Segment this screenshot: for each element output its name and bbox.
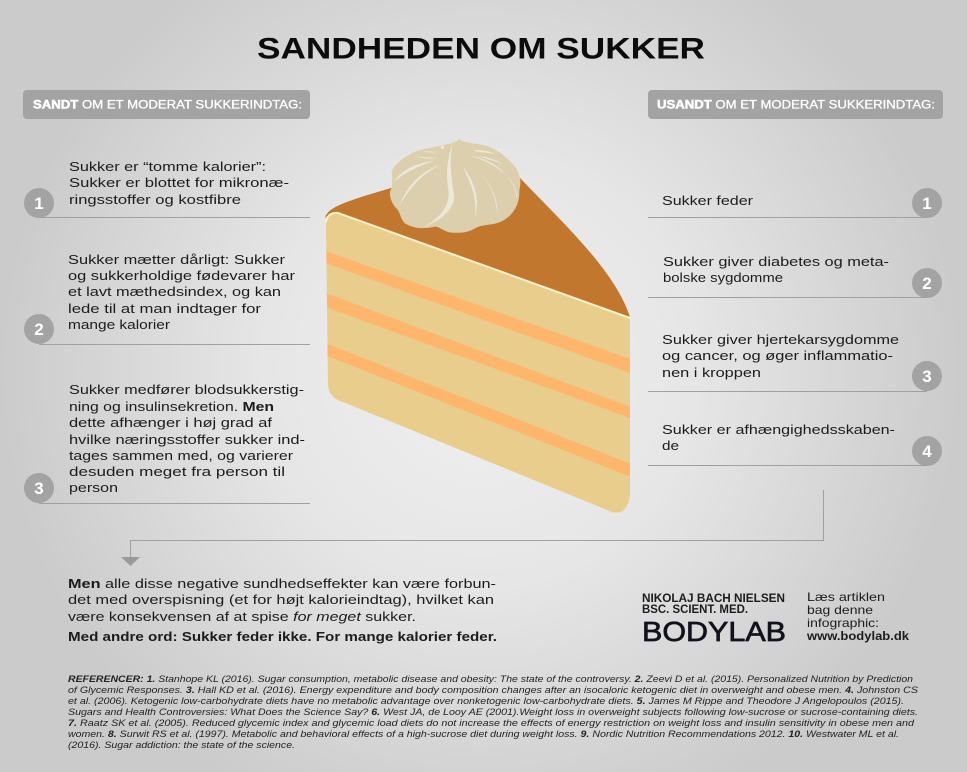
item 3: hvilke næringsstoffer sukker ind- xyxy=(69,432,305,447)
item 1: Sukker feder xyxy=(662,193,754,208)
item 1: 1 xyxy=(922,194,932,213)
item 3: tages sammen med, og varierer xyxy=(69,448,294,463)
conclusion text: Men alle disse negative sundhedseffekter kan være forbun- xyxy=(68,576,496,591)
references: of Glycemic Responses. 3. Hall KD et al. (2016). Energy expenditure and body composition changes after an isocaloric ketogenic diet in overweight and obese men. 4. Johnston CS xyxy=(68,685,919,695)
item 2 xyxy=(648,254,942,298)
panel: true statements xyxy=(23,90,310,504)
item 2: lede til at man indtager for xyxy=(68,301,262,316)
item 4: de xyxy=(662,438,679,453)
item 2: 2 xyxy=(34,320,44,339)
conclusion text xyxy=(68,576,497,644)
references: Sugars and Health Controversies: What Does the Science Say? 6. West JA, de Looy AE (2001).Weight loss in overweight subjects following low-sucrose or sucrose-containing diets. xyxy=(68,707,918,717)
item 1 xyxy=(648,188,942,218)
conclusion text: Med andre ord: Sukker feder ikke. For mange kalorier feder. xyxy=(68,629,497,644)
item 2 xyxy=(24,252,310,344)
link to article: Læs artiklen xyxy=(807,590,885,604)
author and logo: BODYLAB xyxy=(642,616,786,647)
item 2: Sukker giver diabetes og meta- xyxy=(663,254,889,269)
item 2: 2 xyxy=(922,274,932,293)
conclusion text: være konsekvensen af at spise for meget sukker. xyxy=(68,609,416,624)
panel: false statements xyxy=(648,90,943,466)
item 3 xyxy=(648,332,942,392)
link to article xyxy=(806,590,909,643)
item 4: Sukker er afhængighedsskaben- xyxy=(662,422,895,437)
item 3: dette afhænger i høj grad af xyxy=(69,415,272,430)
item 3: og cancer, og øger inflammatio- xyxy=(662,348,893,363)
item 1: Sukker er blottet for mikronæ- xyxy=(69,175,289,190)
item 4: 4 xyxy=(922,442,932,461)
references xyxy=(68,674,919,750)
item 3: nen i kroppen xyxy=(662,365,761,380)
references: et al. (2006). Ketogenic low-carbohydrate diets have no metabolic advantage over nonketogenic low-carbohydrate diets. 5. James M Rippe and Theodore J Angelopoulos (2015). xyxy=(68,696,904,706)
link to article: bag denne xyxy=(807,603,873,617)
author and logo: BSC. SCIENT. MED. xyxy=(642,604,748,616)
link to article: infographic: xyxy=(807,616,879,630)
item 2: et lavt mæthedsindex, og kan xyxy=(68,284,281,299)
link to article: www.bodylab.dk xyxy=(806,629,909,643)
item 1: ringsstoffer og kostfibre xyxy=(69,192,241,207)
illustration: cake slice xyxy=(320,139,636,513)
item 3: 3 xyxy=(922,367,932,386)
heading: usandt: USANDT OM ET MODERAT SUKKERINDTAG: xyxy=(657,100,935,112)
meringue topping xyxy=(390,139,520,233)
item 2: bolske sygdomme xyxy=(663,270,783,285)
item 3: ning og insulinsekretion. Men xyxy=(69,399,274,414)
references: 7. Raatz SK et al. (2005). Reduced glycemic index and glycemic load diets do not increase the effects of energy restriction on weight loss and insulin sensitivity in obese men and xyxy=(68,718,915,728)
item 3: 3 xyxy=(34,479,44,498)
author and logo xyxy=(642,593,786,647)
item 3: person xyxy=(69,480,118,495)
references: REFERENCER: 1. Stanhope KL (2016). Sugar consumption, metabolic disease and obesity: The state of the controversy. 2. Zeevi D et al. (2015). Personalized Nutrition by Prediction xyxy=(68,674,913,684)
references: (2016). Sugar addiction: the state of the science. xyxy=(68,740,295,750)
arrow: connector to conclusion xyxy=(121,490,824,566)
cake top icing xyxy=(325,178,630,317)
conclusion text: det med overspisning (et for højt kalorieindtag), hvilket kan xyxy=(68,592,494,607)
references: women. 8. Surwit RS et al. (1997). Metabolic and behavioral effects of a high-sucrose diet during weight loss. 9. Nordic Nutrition Recommendations 2012. 10. Westwater ML et al. xyxy=(68,729,899,739)
item 3: Sukker medfører blodsukkerstig- xyxy=(69,382,304,397)
item 1: Sukker er “tomme kalorier”: xyxy=(69,159,266,174)
item 3 xyxy=(24,382,310,504)
item 4 xyxy=(648,422,942,466)
filling stripes xyxy=(320,249,636,479)
cake body xyxy=(326,213,630,513)
heading: sandt xyxy=(23,90,310,119)
item 3: Sukker giver hjertekarsygdomme xyxy=(662,332,899,347)
item 1: 1 xyxy=(34,194,44,213)
item 1 xyxy=(24,159,310,218)
heading: sandt: SANDT OM ET MODERAT SUKKERINDTAG: xyxy=(33,100,302,112)
item 2: mange kalorier xyxy=(68,317,171,332)
cream edge xyxy=(326,213,630,318)
title: SANDHEDEN OM SUKKER xyxy=(257,32,705,66)
item 2: og sukkerholdige fødevarer har xyxy=(68,268,296,283)
heading: usandt xyxy=(648,90,943,119)
item 2: Sukker mætter dårligt: Sukker xyxy=(68,252,286,267)
item 3: desuden meget fra person til xyxy=(69,464,285,479)
author and logo: NIKOLAJ BACH NIELSEN xyxy=(642,593,785,605)
